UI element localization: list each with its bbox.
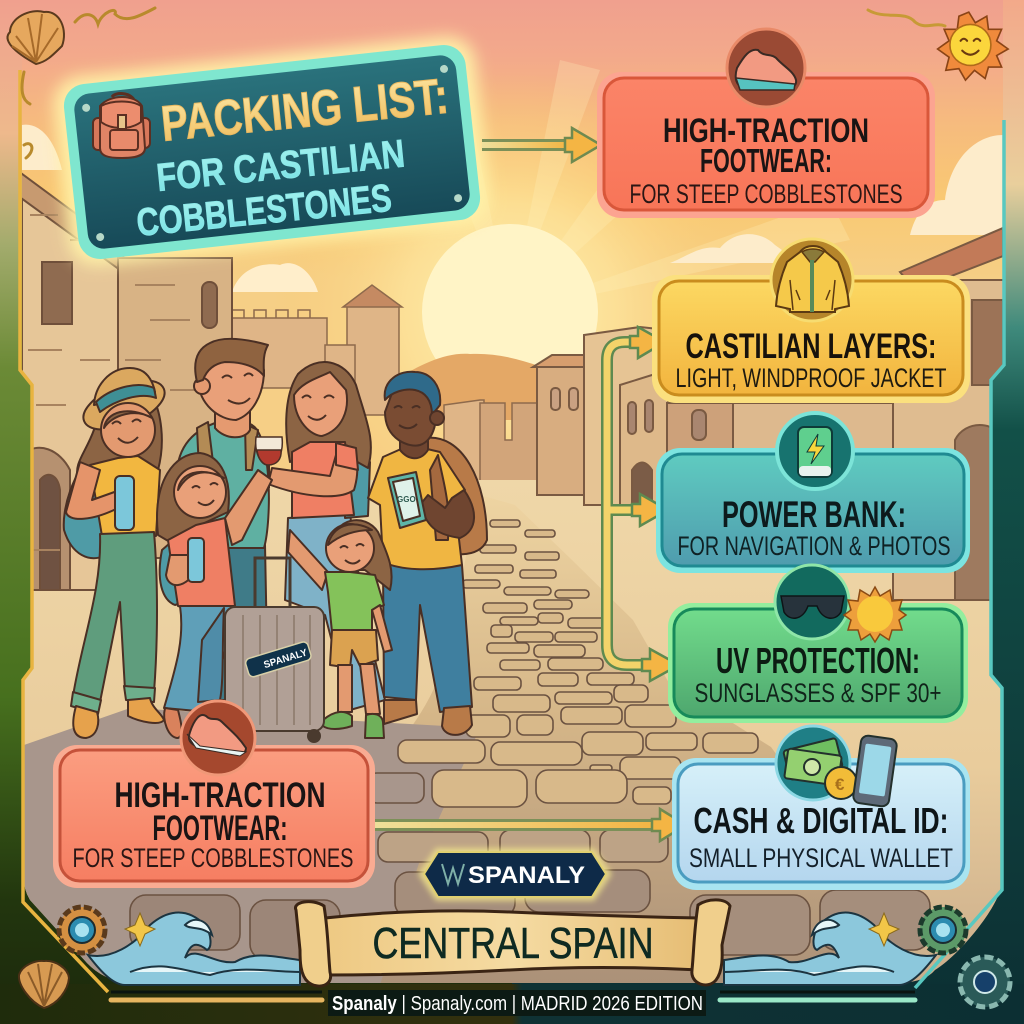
hill (411, 354, 536, 420)
card subtext: FOR STEEP COBBLESTONES (72, 843, 354, 873)
icon: cash, coin and phone: € (835, 775, 845, 794)
footer bar: left (111, 998, 322, 1002)
sign glow (51, 34, 493, 268)
sun disc (422, 224, 598, 364)
footer bar: right (720, 998, 915, 1002)
card heading: HIGH-TRACTION (114, 776, 326, 815)
icon: sparkle left (125, 913, 155, 946)
person: man with backpack: GGO (397, 495, 416, 504)
card: UV protection (668, 565, 968, 723)
icon: jacket in circle (771, 239, 853, 321)
waves: left (88, 912, 300, 985)
card subtext: FOR STEEP COBBLESTONES (630, 179, 902, 209)
icon: backpack (93, 94, 150, 158)
building: left stone house (10, 165, 232, 590)
cloud middle (232, 263, 318, 292)
clouds (22, 125, 1003, 263)
logo badge: Spanaly: SPANALY (468, 862, 585, 889)
sun rays (476, 60, 850, 294)
people group (64, 339, 487, 742)
brick marks (28, 214, 194, 551)
card heading: POWER BANK: (722, 494, 906, 535)
icon: shoe in circle (727, 29, 805, 107)
cobbled road (380, 531, 836, 983)
title text line 3: COBBLESTONES (135, 177, 394, 245)
rivets (82, 65, 462, 241)
title text line 2: FOR CASTILIAN (155, 132, 407, 200)
frame line: right teal (915, 120, 1004, 988)
card: high-traction footwear top (597, 29, 935, 218)
arrow: bracket to three cards (607, 327, 679, 681)
person: man with teal shirt (177, 339, 269, 700)
icon: small sun (844, 587, 906, 642)
icon: sunglasses in circle (775, 565, 849, 639)
title text line 1: PACKING LIST: (159, 68, 451, 152)
person: small girl in green (288, 520, 392, 738)
logo badge: Spanaly (418, 848, 612, 901)
icon: scallop shell top left (8, 11, 64, 64)
icon: gear left (59, 907, 105, 953)
card heading: HIGH-TRACTION (663, 112, 869, 150)
footer credit: Spanaly | Spanaly.com | MADRID 2026 EDITION (332, 993, 703, 1015)
sun glow (372, 128, 651, 439)
icon: gear bottom right (960, 957, 1010, 1007)
icon: shoe in circle (181, 701, 255, 775)
icon: power bank in circle (777, 413, 853, 489)
scroll title: CENTRAL SPAIN (372, 919, 654, 968)
person: girl holding bottle (157, 453, 272, 738)
person: man with backpack (368, 372, 487, 735)
person: woman in hat (64, 368, 171, 738)
ground (0, 480, 1024, 1000)
shadow at group's feet (24, 708, 480, 985)
icon: cash, coin and phone (776, 726, 898, 807)
flourish: top left (22, 8, 155, 158)
title sign: packing list (51, 34, 493, 268)
card heading line 2: FOOTWEAR: (700, 142, 832, 179)
icon: sparkle right (869, 913, 899, 946)
card: high-traction footwear bottom (53, 701, 375, 888)
suitcase sticker (244, 641, 312, 678)
footer text (328, 990, 706, 1016)
wine glass (256, 437, 282, 488)
card: power bank (656, 413, 970, 573)
icon: gear right (920, 907, 966, 953)
waves: right (724, 912, 936, 985)
card: cash and digital ID (672, 726, 970, 890)
distant town (232, 285, 537, 495)
card subtext: SUNGLASSES & SPF 30+ (694, 678, 942, 708)
person: woman with coral shirt (268, 362, 385, 710)
card heading line 2: FOOTWEAR: (152, 809, 288, 848)
arrow: footwear to cash (368, 809, 686, 841)
card subtext: SMALL PHYSICAL WALLET (689, 843, 953, 873)
scroll banner: Central Spain (295, 900, 730, 986)
arrow: title to footwear (482, 128, 601, 162)
suitcase (225, 558, 324, 742)
building: right town (533, 228, 1008, 600)
icon: scallop shell bottom left (19, 961, 69, 1008)
flourish: top right (868, 10, 945, 26)
sign body (62, 43, 482, 261)
cobblestones (130, 520, 930, 960)
card: Castilian layers (652, 239, 970, 403)
card heading: CASTILIAN LAYERS: (686, 327, 936, 366)
frame line: left gold (20, 70, 108, 992)
suitcase sticker: SPANALY (262, 647, 309, 671)
card heading: UV PROTECTION: (716, 640, 920, 681)
icon: smiling sun top right (938, 12, 1008, 80)
